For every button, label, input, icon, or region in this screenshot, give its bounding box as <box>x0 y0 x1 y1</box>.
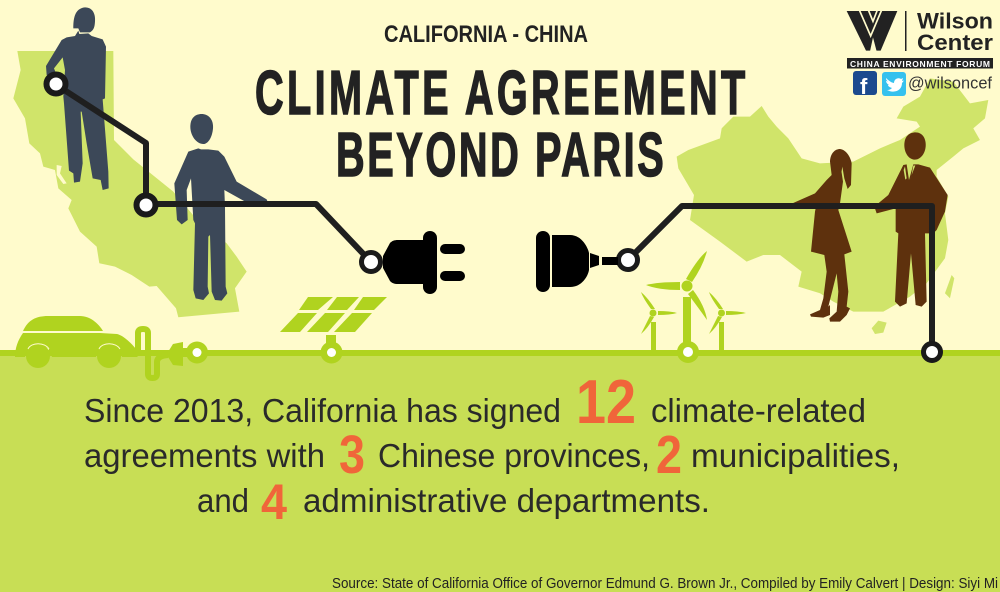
title <box>255 59 745 190</box>
connector line: California <box>55 84 371 262</box>
highlighted numbers: 12 <box>576 368 636 437</box>
icon: black plug <box>383 231 465 294</box>
highlighted numbers <box>261 368 682 530</box>
logo wordmark: Wilson <box>917 8 993 34</box>
map: California <box>13 51 247 317</box>
car charging cable <box>138 329 168 378</box>
person: woman in navy <box>46 7 109 190</box>
icon: electric car <box>15 316 140 368</box>
subtitle: CALIFORNIA - CHINA <box>384 21 588 48</box>
title: CLIMATE AGREEMENT <box>255 59 745 128</box>
icon: twitter <box>882 72 906 96</box>
social handle: @wilsoncef <box>908 74 992 92</box>
connector nodes: China <box>618 250 940 360</box>
icon: solar panel <box>280 297 387 364</box>
statement text: Chinese provinces, <box>378 437 650 474</box>
statement text: administrative departments. <box>303 482 710 519</box>
statement text: agreements with <box>84 437 325 474</box>
icon: wind turbines <box>641 251 746 363</box>
highlighted numbers: 4 <box>261 474 287 530</box>
icon: facebook: f <box>860 74 868 99</box>
logo mark: W <box>847 10 897 51</box>
icon: facebook <box>853 71 877 99</box>
highlighted numbers: 2 <box>656 425 682 485</box>
logo: Wilson Center <box>847 8 993 69</box>
person: man in brown <box>874 132 948 307</box>
icon: black socket plug <box>536 231 618 292</box>
logo banner: CHINA ENVIRONMENT FORUM <box>850 59 990 69</box>
icon: charging plug and node <box>168 342 208 366</box>
statement text: climate-related <box>651 392 866 429</box>
connector nodes: California <box>46 74 380 272</box>
ground panel <box>0 350 1000 592</box>
statement text <box>84 392 900 519</box>
highlighted numbers: 3 <box>339 425 365 485</box>
statement text: municipalities, <box>691 437 900 474</box>
connector line: China <box>628 206 932 352</box>
logo wordmark <box>917 8 993 55</box>
logo wordmark: Center <box>917 30 993 55</box>
statement text: Since 2013, California has signed <box>84 392 561 429</box>
person: man in navy <box>174 114 268 301</box>
person: woman in brown <box>792 149 852 322</box>
statement text: and <box>197 482 249 519</box>
map: China <box>677 78 988 334</box>
title: BEYOND PARIS <box>336 121 664 190</box>
